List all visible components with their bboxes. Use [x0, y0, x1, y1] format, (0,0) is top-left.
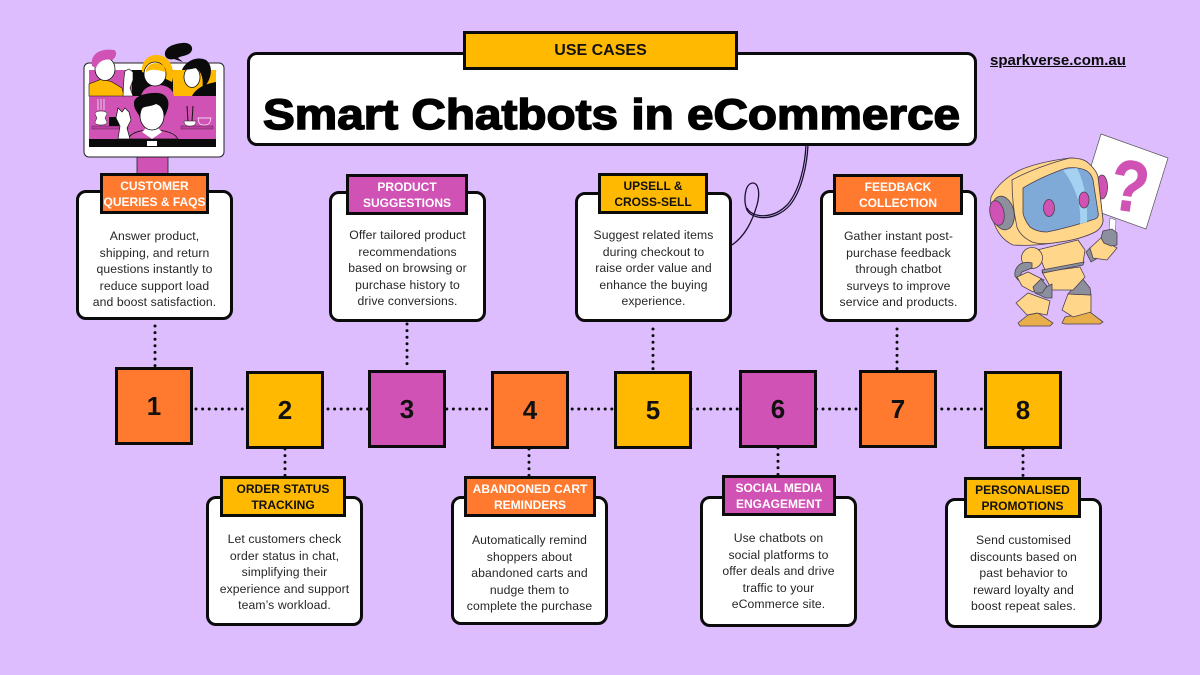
- numbered step 4: 4: [523, 394, 537, 424]
- tag: feedback collection: COLLECTION: [859, 196, 937, 210]
- card text: [575, 192, 732, 322]
- tag: product suggestions: PRODUCT: [377, 180, 437, 194]
- numbered step 6: 6: [771, 394, 785, 424]
- tag: upsell & cross-sell: [598, 173, 708, 214]
- card: order status tracking: [206, 476, 363, 626]
- card text: Let customers check: [228, 532, 341, 546]
- card text: [945, 498, 1102, 628]
- numbered step 8: 8: [1016, 394, 1030, 424]
- tag: feedback collection: FEEDBACK: [865, 180, 931, 194]
- card text: discounts based on: [970, 550, 1077, 564]
- tag: order status tracking: [220, 476, 346, 517]
- card text: Use chatbots on: [734, 531, 823, 545]
- numbered step 2: [246, 371, 324, 449]
- card text: raise order value and: [595, 261, 712, 275]
- card text: simplifying their: [242, 565, 327, 579]
- tag: customer queries & FAQs: [100, 173, 209, 214]
- card: personalised promotions: [945, 477, 1102, 628]
- card text: complete the purchase: [467, 599, 592, 613]
- card text: traffic to your: [743, 580, 814, 594]
- numbered step 3: [368, 370, 446, 448]
- card text: Offer tailored product: [349, 228, 466, 242]
- card text: order status in chat,: [230, 548, 339, 562]
- numbered step 7: 7: [891, 394, 905, 424]
- card text: Suggest related items: [594, 228, 713, 242]
- title box: [247, 52, 977, 146]
- illustration: robot holding question sign: [989, 134, 1168, 326]
- card text: social platforms to: [728, 548, 829, 562]
- numbered step 1: 1: [147, 390, 161, 420]
- card text: [329, 191, 486, 322]
- card text: offer deals and drive: [722, 564, 835, 578]
- illustration: video call on monitor: [84, 42, 224, 173]
- robot body: [988, 158, 1117, 326]
- card text: abandoned carts and: [471, 566, 588, 580]
- card text: eCommerce site.: [732, 597, 825, 611]
- card text: enhance the buying: [599, 278, 708, 292]
- numbered step 5: 5: [646, 394, 660, 424]
- header panel with title: [247, 31, 977, 146]
- card: abandoned cart reminders: [451, 476, 608, 625]
- tag: upsell & cross-sell: UPSELL &: [623, 178, 683, 192]
- tag: personalised promotions: PROMOTIONS: [981, 498, 1064, 512]
- numbered step 7: [859, 370, 937, 448]
- tag: social media engagement: ENGAGEMENT: [736, 496, 822, 510]
- tag: order status tracking: ORDER STATUS: [237, 482, 329, 496]
- icon: curly connector from title to upsell card: [732, 145, 809, 246]
- card text: [451, 496, 608, 625]
- card text: and boost satisfaction.: [93, 295, 216, 309]
- tag: product suggestions: [346, 174, 468, 215]
- card text: questions instantly to: [96, 262, 213, 276]
- card text: team’s workload.: [238, 598, 331, 612]
- card text: surveys to improve: [846, 278, 951, 292]
- numbered step 1: [115, 367, 193, 445]
- card text: purchase history to: [355, 278, 460, 292]
- tag: order status tracking: TRACKING: [251, 498, 315, 512]
- card text: experience.: [621, 294, 686, 308]
- card text: past behavior to: [979, 566, 1068, 580]
- card text: reduce support load: [100, 278, 209, 292]
- tag: personalised promotions: PERSONALISED: [975, 482, 1070, 496]
- card text: experience and support: [220, 582, 349, 596]
- numbered step 3: 3: [400, 394, 414, 424]
- numbered step 6: [739, 370, 817, 448]
- eyebrow tag: use cases: [463, 31, 738, 70]
- card text: Automatically remind: [472, 533, 587, 547]
- eyebrow tag: use cases: USE CASES: [554, 42, 647, 58]
- card text: reward loyalty and: [973, 582, 1074, 596]
- card text: Send customised: [976, 533, 1071, 547]
- tag: customer queries & FAQs: CUSTOMER: [120, 178, 189, 192]
- card: customer queries & FAQs: [76, 173, 233, 320]
- numbered step 4: [491, 371, 569, 449]
- numbered step 5: [614, 371, 692, 449]
- card text: Answer product,: [110, 229, 199, 243]
- tag: abandoned cart reminders: [464, 476, 596, 517]
- card text: shipping, and return: [100, 246, 209, 260]
- card: social media engagement: [700, 475, 857, 627]
- card text: shoppers about: [487, 550, 572, 564]
- website address: sparkverse.com.au: [990, 52, 1126, 69]
- tag: feedback collection: [833, 174, 963, 215]
- card text: [820, 190, 977, 322]
- card text: [206, 496, 363, 626]
- tag: abandoned cart reminders: REMINDERS: [494, 498, 566, 512]
- tag: personalised promotions: [964, 477, 1081, 518]
- card text: recommendations: [358, 244, 457, 258]
- card text: boost repeat sales.: [971, 599, 1076, 613]
- card text: service and products.: [840, 295, 957, 309]
- card: upsell & cross-sell: [575, 173, 732, 322]
- card text: drive conversions.: [357, 294, 458, 308]
- tag: abandoned cart reminders: ABANDONED CART: [473, 482, 587, 496]
- card text: Gather instant post-: [844, 229, 953, 243]
- tag: product suggestions: SUGGESTIONS: [363, 196, 451, 210]
- title: Smart Chatbots in eCommerce: [263, 91, 960, 139]
- tag: upsell & cross-sell: CROSS-SELL: [614, 194, 692, 208]
- card: feedback collection: [820, 174, 977, 322]
- card text: through chatbot: [855, 262, 942, 276]
- card text: nudge them to: [490, 582, 569, 596]
- card text: during checkout to: [603, 244, 704, 258]
- card: product suggestions: [329, 174, 486, 322]
- card text: based on browsing or: [348, 261, 467, 275]
- sign with question mark: ?: [1106, 145, 1154, 229]
- tag: customer queries & FAQs: QUERIES & FAQS: [103, 194, 206, 208]
- card text: [76, 190, 233, 320]
- numbered step 2: 2: [278, 394, 292, 424]
- numbered step 8: [984, 371, 1062, 449]
- sign with question mark: [1079, 134, 1168, 234]
- card text: purchase feedback: [846, 246, 951, 260]
- tag: social media engagement: [722, 475, 836, 516]
- card text: [700, 496, 857, 627]
- tag: social media engagement: SOCIAL MEDIA: [735, 480, 823, 494]
